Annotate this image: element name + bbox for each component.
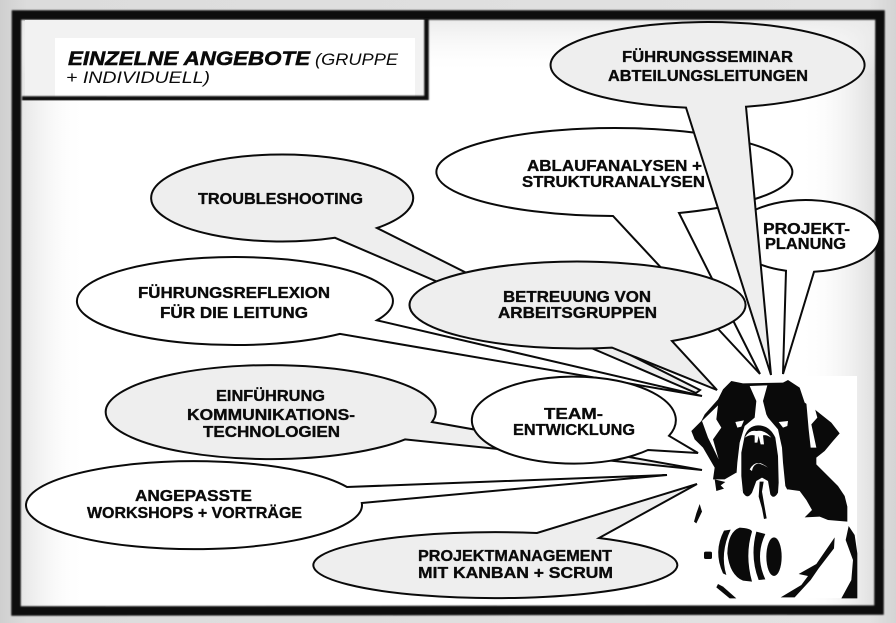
bubble: Einführung Kommunikationstechnologien: TECHNOLOGIEN — [203, 424, 340, 441]
bubble: Team-Entwicklung: TEAM- — [544, 406, 603, 423]
title box — [22, 18, 426, 98]
bubble: Führungsreflexion für die Leitung: FÜR DIE LEITUNG — [160, 303, 308, 322]
bubble: Troubleshooting — [151, 154, 700, 393]
bubble: Führungsseminar Abteilungsleitungen — [551, 22, 865, 375]
bubble: Projektplanung: PROJEKT- — [763, 221, 850, 238]
bubble: Führungsreflexion für die Leitung: FÜHRUNGSREFLEXION — [138, 283, 330, 302]
image backdrop: dog — [690, 376, 857, 598]
bubble: Projektplanung: PLANUNG — [765, 236, 846, 253]
bubble: Angepasste Workshops + Vorträge — [26, 461, 667, 549]
bubble: Einführung Kommunikationstechnologien — [106, 365, 702, 470]
bubble: Einführung Kommunikationstechnologien: KOMMUNIKATIONS- — [187, 407, 355, 424]
bubble: Team-Entwicklung: ENTWICKLUNG — [513, 422, 635, 439]
bubble: Ablaufanalysen + Strukturanalysen: STRUKTURANALYSEN — [522, 174, 705, 191]
bubble: Ablaufanalysen + Strukturanalysen: ABLAUFANALYSEN + — [527, 158, 702, 175]
bubble: Projektmanagement mit Kanban + Scrum: PROJEKTMANAGEMENT — [418, 548, 612, 565]
bubble: Führungsseminar Abteilungsleitungen: FÜHRUNGSSEMINAR — [622, 47, 793, 66]
bubble: Angepasste Workshops + Vorträge: WORKSHOPS + VORTRÄGE — [87, 504, 302, 522]
bubble: Team-Entwicklung — [472, 377, 698, 464]
bubble: Projektmanagement mit Kanban + Scrum: MIT KANBAN + SCRUM — [418, 565, 613, 582]
title: subtitle first part: (GRUPPE — [315, 50, 399, 69]
bubble: Führungsreflexion für die Leitung — [77, 257, 702, 396]
bubble: Projektmanagement mit Kanban + Scrum — [313, 484, 697, 598]
bubble: Ablaufanalysen + Strukturanalysen — [436, 128, 792, 374]
title: bold line: EINZELNE ANGEBOTE — [68, 49, 312, 70]
bubble: Führungsseminar Abteilungsleitungen: ABTEILUNGSLEITUNGEN — [608, 68, 808, 85]
bubble: Einführung Kommunikationstechnologien: EINFÜHRUNG — [216, 386, 325, 405]
bubble: Troubleshooting: TROUBLESHOOTING — [198, 191, 363, 208]
icon: St. Bernard dog with barrel — [691, 380, 857, 598]
bubble: Projektplanung — [732, 200, 880, 374]
bubble: Betreuung von Arbeitsgruppen: ARBEITSGRUPPEN — [498, 305, 657, 322]
bubble: Betreuung von Arbeitsgruppen: BETREUUNG VON — [503, 289, 651, 306]
bubble: Betreuung von Arbeitsgruppen — [410, 262, 746, 390]
bubble: Angepasste Workshops + Vorträge: ANGEPASSTE — [135, 488, 252, 505]
title: subtitle second part: + INDIVIDUELL) — [66, 68, 210, 87]
